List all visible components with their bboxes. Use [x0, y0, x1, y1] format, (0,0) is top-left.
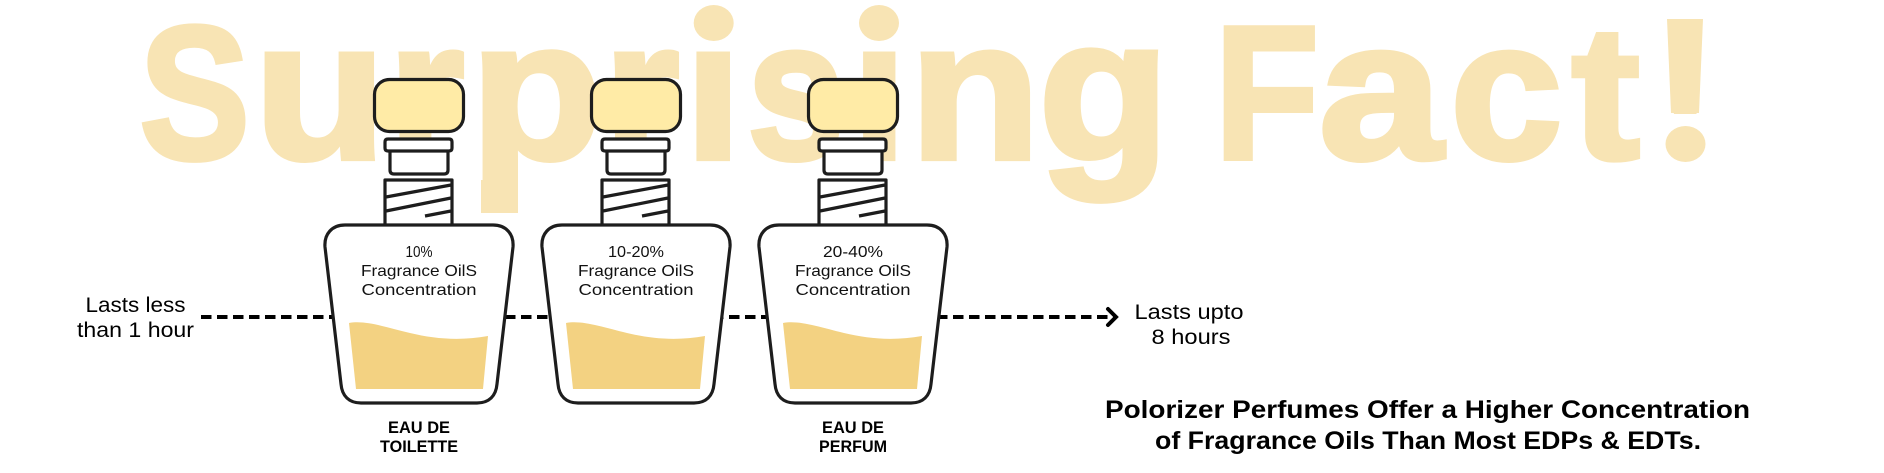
liquid — [783, 322, 922, 389]
threaded neck — [602, 180, 669, 226]
label: lasts upto 8 hours: 8 hours — [1152, 326, 1230, 349]
bottle name: EAU DE — [388, 418, 450, 437]
bottle name: PERFUM — [819, 437, 887, 456]
closing statement: Polorizer Perfumes Offer a Higher Concentration — [1105, 396, 1750, 424]
concentration text: 20-40% — [823, 244, 883, 261]
concentration text: Fragrance OilS — [361, 263, 477, 280]
bottle name: TOILETTE — [380, 437, 458, 456]
label: lasts less than 1 hour: Lasts less — [86, 294, 186, 317]
collar — [819, 139, 886, 174]
threaded neck — [819, 180, 886, 226]
concentration text: Fragrance OilS — [578, 263, 694, 280]
bottle: eau de perfum — [759, 80, 947, 456]
glass body — [759, 225, 947, 403]
bottle: eau de toilette — [325, 80, 513, 456]
liquid — [566, 322, 705, 389]
collar — [602, 139, 669, 174]
label: lasts less than 1 hour: than 1 hour — [77, 319, 194, 342]
concentration text: Concentration — [796, 282, 910, 299]
bottle: middle — [542, 80, 730, 403]
glass body — [325, 225, 513, 403]
collar — [385, 139, 452, 174]
bottle name: EAU DE — [822, 418, 884, 437]
concentration text: 10% — [406, 244, 432, 261]
liquid — [349, 322, 488, 389]
dashed arrow line — [201, 309, 1116, 325]
title — [140, 0, 1717, 213]
concentration text: Concentration — [578, 282, 694, 299]
closing statement: of Fragrance Oils Than Most EDPs & EDTs. — [1155, 427, 1701, 455]
concentration text: Fragrance OilS — [795, 263, 911, 280]
threaded neck — [385, 180, 452, 226]
cap — [808, 80, 898, 132]
cap — [374, 80, 464, 132]
glass body — [542, 225, 730, 403]
concentration text: Concentration — [362, 282, 476, 299]
label: lasts upto 8 hours: Lasts upto — [1134, 301, 1244, 324]
concentration text: 10-20% — [608, 244, 664, 261]
cap — [592, 80, 680, 132]
